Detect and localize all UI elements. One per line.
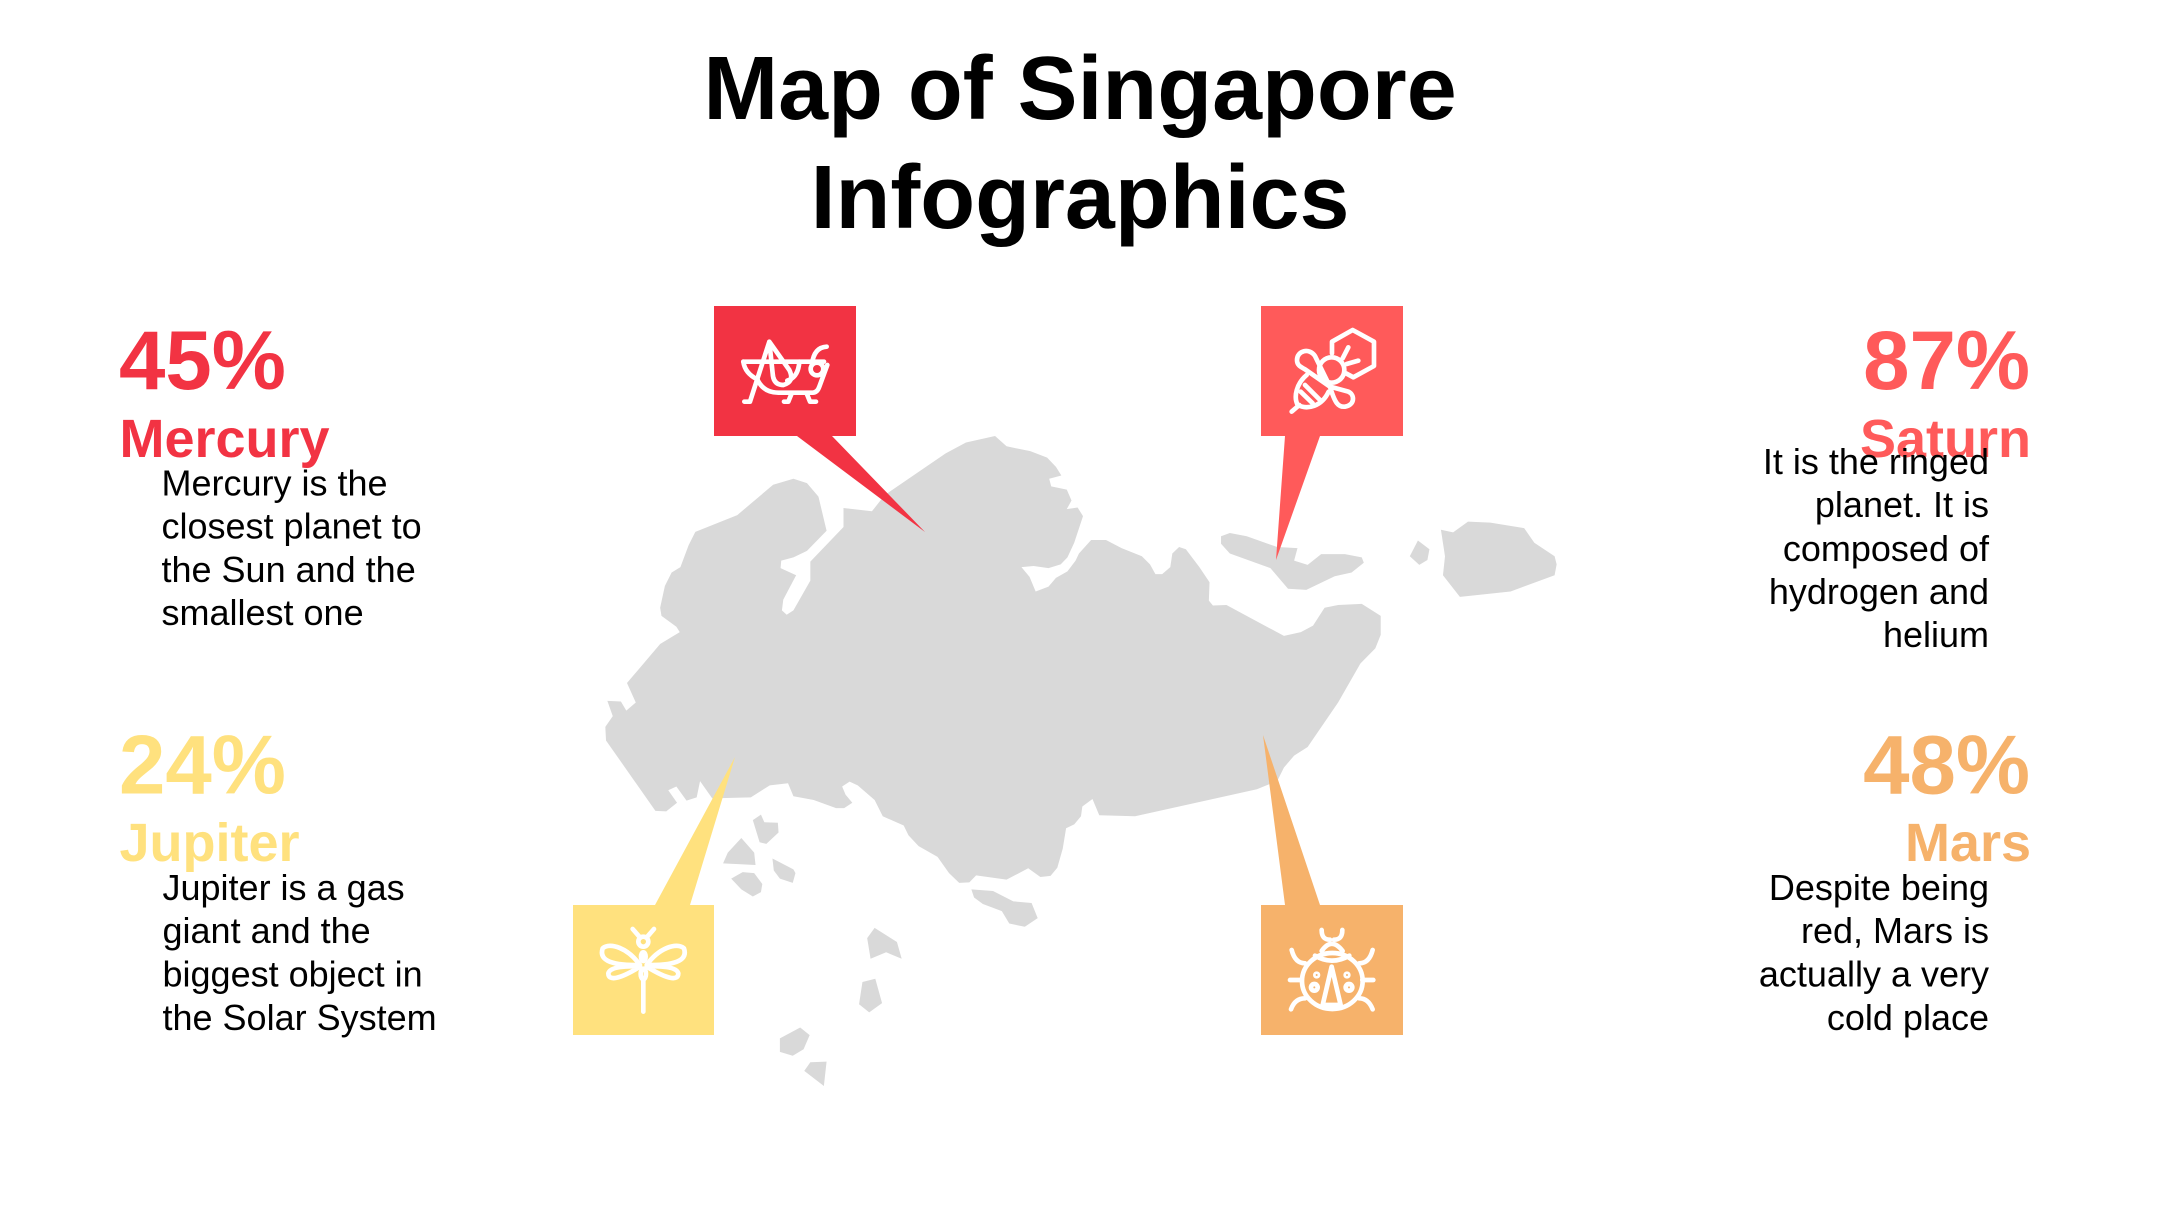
description: Saturn: planet. It is	[1815, 484, 1989, 525]
icon: dragonfly	[602, 929, 685, 1012]
description: Jupiter: giant and the	[162, 910, 371, 951]
callout: Jupiter dragonfly	[573, 757, 735, 1035]
icon: ladybug	[1290, 930, 1373, 1009]
description: Mars: Despite being	[1769, 867, 1989, 908]
stat: 87%: 87%	[1863, 314, 2030, 407]
panel: Mars	[1759, 718, 2031, 1038]
stat: 45%: 45%	[119, 314, 286, 407]
main island	[605, 436, 1381, 883]
stat: 24%: 24%	[119, 718, 286, 812]
heading: Mars: Mars	[1905, 813, 2031, 873]
description: Jupiter: Jupiter is a gas	[162, 867, 405, 908]
stat: 48%: 48%	[1863, 718, 2030, 812]
description: Mercury: the Sun and the	[162, 549, 416, 590]
title: Map of Singapore	[703, 39, 1457, 139]
icon: bee	[1292, 330, 1374, 412]
title: Infographics	[811, 148, 1349, 248]
callout: Mars ladybug	[1261, 735, 1403, 1035]
description: Saturn: hydrogen and	[1769, 571, 1989, 612]
callout: Mercury grasshopper	[714, 306, 925, 532]
description: Mars: actually a very	[1759, 954, 1989, 994]
panel: Jupiter	[119, 718, 437, 1038]
description: Jupiter: biggest object in	[162, 954, 423, 994]
heading: Mercury: Mercury	[120, 409, 330, 469]
description: Saturn: It is the ringed	[1763, 441, 1989, 482]
callout: Saturn bee	[1261, 306, 1403, 560]
description: Mars: red, Mars is	[1801, 910, 1989, 951]
description: Mars: cold place	[1827, 997, 1989, 1038]
description: Jupiter: the Solar System	[162, 997, 437, 1038]
description: Saturn: composed of	[1783, 528, 1990, 569]
description: Saturn: helium	[1883, 614, 1989, 655]
title	[703, 39, 1457, 248]
panel: Mercury	[119, 314, 422, 633]
heading: Saturn: Saturn	[1860, 409, 2031, 469]
heading: Jupiter: Jupiter	[120, 813, 300, 873]
description: Mercury: closest planet to	[162, 506, 422, 546]
description: Mercury: smallest one	[162, 592, 364, 633]
panel: Saturn	[1763, 314, 2031, 655]
icon: grasshopper	[743, 342, 827, 402]
outlying islands	[723, 522, 1557, 1086]
map of Singapore	[605, 436, 1557, 1086]
description: Mercury: Mercury is the	[162, 462, 388, 504]
